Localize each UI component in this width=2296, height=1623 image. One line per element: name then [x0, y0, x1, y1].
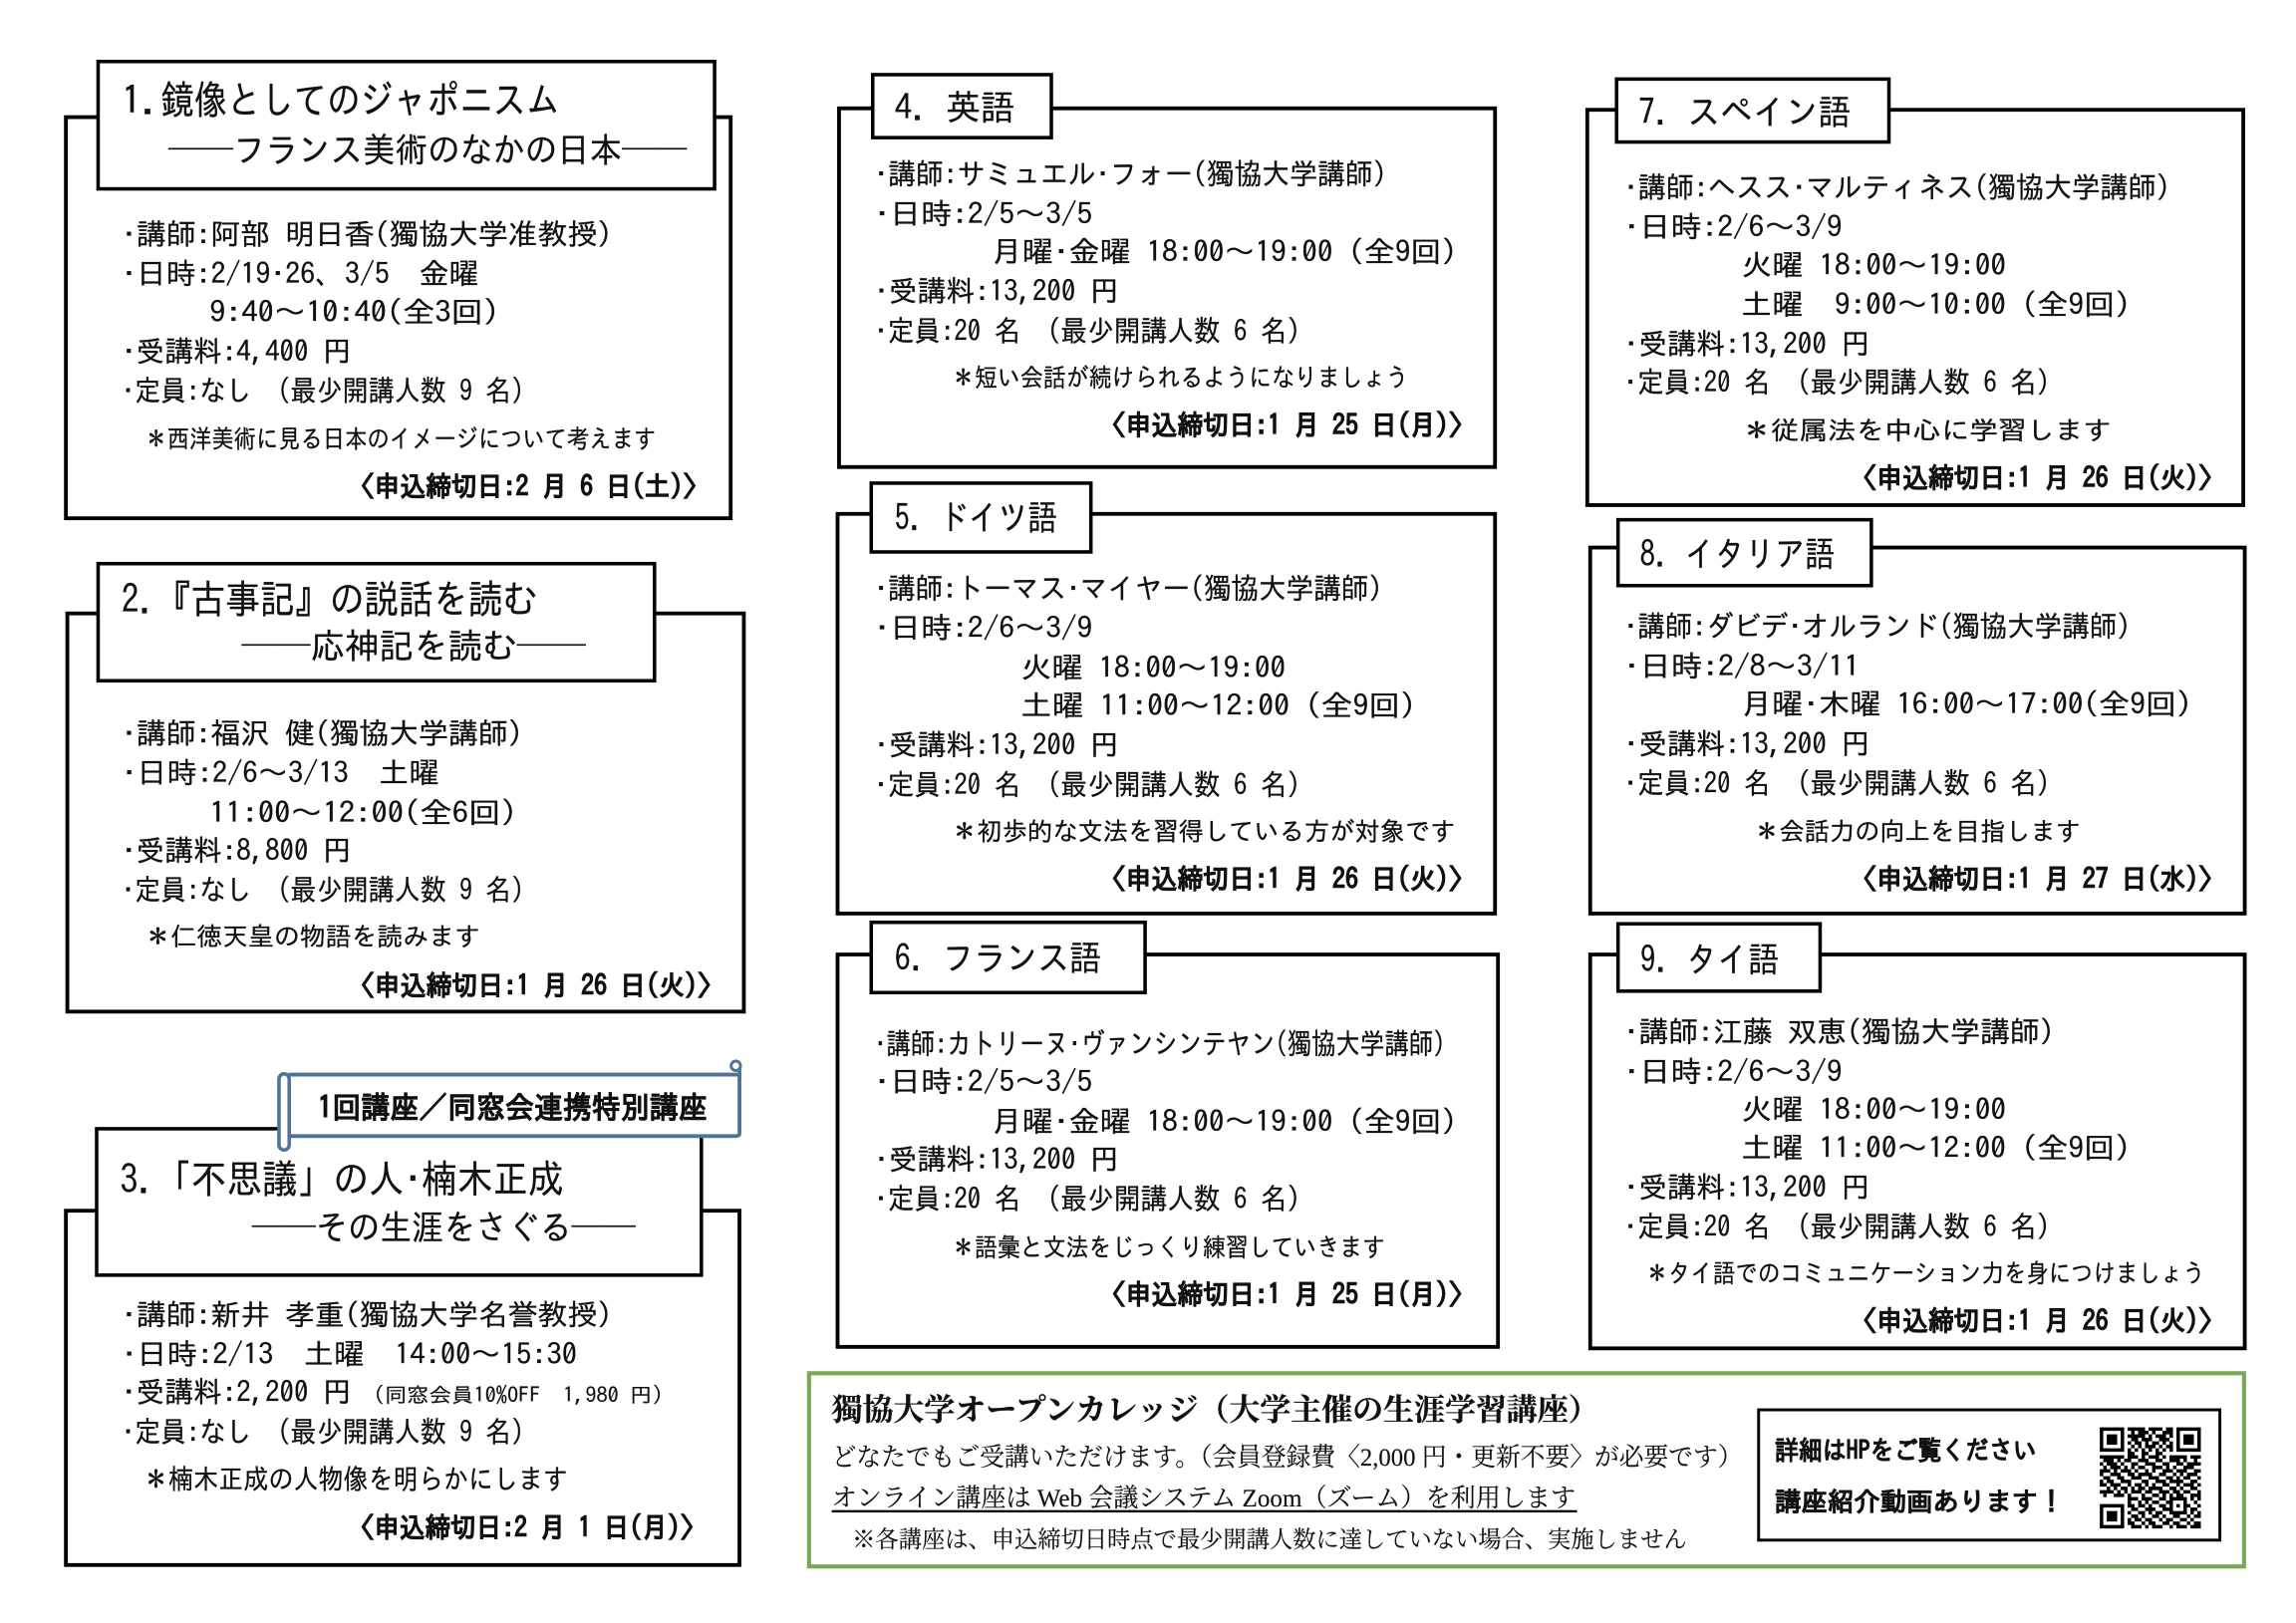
panel: course 5: [837, 483, 1495, 914]
panel: open college footer: [809, 1373, 2244, 1566]
note: ＊仁徳天皇の物語を読みます: [144, 924, 480, 949]
course details: ･講師:江藤 双恵(獨協大学講師): [1624, 1016, 2055, 1046]
heading: course 2: [98, 564, 655, 680]
course details: ･定員:20 名 (最少開講人数 6 名): [1624, 767, 2050, 797]
panel frame: [66, 118, 730, 518]
ribbon: special lecture: 1回講座／同窓会連携特別講座: [318, 1092, 708, 1123]
course details: ･講師:ヘスス･マルティネス(獨協大学講師): [1624, 171, 2170, 201]
course details: [1624, 171, 2170, 397]
footer text: どなたでもご受講いただけます。（会員登録費〈2,000 円・更新不要〉が必要です）: [832, 1443, 1743, 1472]
note: ＊西洋美術に見る日本のイメージについて考えます: [144, 426, 656, 452]
course details: ･講師:サミュエル･フォー(獨協大学講師): [874, 158, 1387, 188]
course details: ･日時:2/13 土曜 14:00〜15:30: [122, 1338, 577, 1368]
course details: ･定員:20 名 (最少開講人数 6 名): [1624, 367, 2050, 397]
panel: course 6: [837, 923, 1498, 1347]
deadline: 〈申込締切日:1 月 26 日(火)〉: [1851, 463, 2224, 491]
panel: course 7: [1587, 79, 2243, 505]
course details: ･受講料:13,200 円: [1624, 1172, 1869, 1202]
course details: ･日時:2/6〜3/9: [1624, 211, 1842, 241]
heading: course 1: 鏡像としてのジャポニスム: [161, 80, 559, 120]
heading: course 2: ──応神記を読む──: [241, 629, 586, 664]
panel frame: [839, 109, 1495, 467]
course details: ･定員:なし (最少開講人数 9 名): [122, 875, 524, 905]
panel: course 4: [839, 75, 1495, 467]
course details: ･日時:2/6〜3/13 土曜: [122, 757, 439, 787]
course details: 9:40〜10:40(全3回): [209, 296, 499, 326]
course details: ･定員:なし (最少開講人数 9 名): [122, 1416, 524, 1446]
course details: 月曜･木曜 16:00〜17:00(全9回): [1741, 688, 2192, 718]
course details: ･講師:福沢 健(獨協大学講師): [122, 717, 523, 747]
heading: course 1: 1.: [122, 80, 161, 120]
footer text: オンライン講座は Web 会議システム Zoom（ズーム）を利用します: [832, 1484, 1576, 1512]
note: ＊短い会話が続けられるようになりましょう: [952, 365, 1409, 391]
deadline: 〈申込締切日:1 月 26 日(火)〉: [1851, 1307, 2224, 1335]
course details: [874, 573, 1416, 799]
panel frame: [1590, 548, 2245, 914]
ribbon: special lecture: [279, 1061, 740, 1150]
heading: course 3: [97, 1129, 702, 1275]
panel: course 9: [1590, 924, 2245, 1348]
heading: course 7: [1616, 79, 1889, 142]
note: ＊従属法を中心に学習します: [1743, 417, 2112, 443]
panel frame: [1587, 110, 2243, 505]
heading: course 9: [1618, 924, 1820, 991]
heading: course 5: [871, 483, 1091, 552]
course details: [874, 1028, 1457, 1214]
callout: website and QR: [1759, 1410, 2220, 1540]
course details: [874, 158, 1457, 345]
course details: ･講師:トーマス･マイヤー(獨協大学講師): [874, 573, 1382, 603]
course details: [122, 717, 524, 905]
heading: course 3: ──その生涯をさぐる──: [252, 1211, 636, 1245]
course details: ･定員:20 名 (最少開講人数 6 名): [874, 769, 1300, 799]
heading: course 6: 6. フランス語: [895, 941, 1101, 975]
note: ＊タイ語でのコミュニケーション力を身につけましょう: [1646, 1260, 2205, 1286]
panel: course 1: [66, 62, 730, 518]
course details: 土曜 11:00〜12:00 (全9回): [1741, 1132, 2131, 1162]
deadline: 〈申込締切日:1 月 25 日(月)〉: [1100, 410, 1475, 438]
course details: ･定員:20 名 (最少開講人数 6 名): [874, 315, 1300, 345]
note: ＊楠木正成の人物像を明らかにします: [144, 1465, 568, 1492]
panel: course 2: [68, 564, 743, 1011]
course details: ･受講料:13,200 円: [874, 276, 1119, 306]
course details: ･定員:20 名 (最少開講人数 6 名): [1624, 1212, 2050, 1241]
panel: course 3: [66, 1061, 740, 1565]
deadline: 〈申込締切日:2 月 1 日(月)〉: [349, 1513, 706, 1541]
panel frame: [68, 614, 743, 1011]
course details: [1624, 611, 2192, 797]
footer text: [832, 1443, 1743, 1553]
course details: ･受講料:13,200 円: [874, 1144, 1119, 1174]
panel: course 8: [1590, 520, 2245, 914]
panel frame: [837, 954, 1498, 1347]
heading: course 4: 4. 英語: [895, 91, 1014, 126]
course details: [122, 1299, 664, 1446]
course details: ･日時:2/19･26、3/5 金曜: [122, 258, 478, 288]
course details: [1624, 1016, 2131, 1241]
footer text: ※各講座は、申込締切日時点で最少開講人数に達していない場合、実施しません: [852, 1526, 1687, 1553]
deadline: 〈申込締切日:1 月 27 日(水)〉: [1851, 865, 2224, 893]
course details: ･講師:カトリーヌ･ヴァンシンテヤン(獨協大学講師): [874, 1028, 1445, 1058]
heading: course 8: 8. イタリア語: [1640, 537, 1835, 572]
panel frame: [66, 1211, 739, 1565]
course details: ･講師:ダビデ･オルランド(獨協大学講師): [1624, 611, 2131, 641]
course details: ･受講料:4,400 円: [122, 336, 352, 366]
course details: ･定員:20 名 (最少開講人数 6 名): [874, 1184, 1300, 1214]
panel frame: [1590, 954, 2245, 1348]
course details: ･受講料:13,200 円: [874, 729, 1119, 759]
course details: ･日時:2/6〜3/9: [1624, 1056, 1842, 1086]
callout: website and QR: 詳細はHPをご覧ください: [1775, 1437, 2037, 1464]
course details: 火曜 18:00〜19:00: [1741, 249, 2006, 279]
course details: ･日時:2/8〜3/11: [1624, 651, 1860, 680]
heading: course 8: [1618, 520, 1871, 586]
heading: course 2: 2.『古事記』の説話を読む: [122, 579, 537, 619]
note: ＊会話力の向上を目指します: [1754, 818, 2081, 844]
course details: ･講師:新井 孝重(獨協大学名誉教授): [122, 1299, 612, 1329]
course details: ･日時:2/5〜3/5: [874, 1066, 1092, 1096]
panel frame: [837, 514, 1495, 914]
footer title: 獨協大学オープンカレッジ（大学主催の生涯学習講座）: [831, 1393, 1599, 1427]
course details: ･受講料:2,200 円: [122, 1377, 352, 1407]
heading: course 6: [871, 923, 1145, 992]
course details: ･日時:2/6〜3/9: [874, 613, 1092, 643]
deadline: 〈申込締切日:1 月 25 日(月)〉: [1100, 1280, 1475, 1308]
heading: course 7: 7. スペイン語: [1638, 95, 1851, 130]
footer frame: [809, 1373, 2244, 1566]
course details: 火曜 18:00〜19:00: [1020, 652, 1286, 681]
callout: website and QR: 講座紹介動画あります！: [1775, 1488, 2065, 1514]
course details: 月曜･金曜 18:00〜19:00 (全9回): [992, 1106, 1457, 1136]
course details: 11:00〜12:00(全6回): [209, 797, 517, 827]
deadline: 〈申込締切日:1 月 26 日(火)〉: [1100, 865, 1475, 893]
course details: ･受講料:13,200 円: [1624, 329, 1869, 359]
course details: 火曜 18:00〜19:00: [1741, 1094, 2006, 1124]
note: ＊語彙と文法をじっくり練習していきます: [952, 1234, 1385, 1260]
course details: 土曜 9:00〜10:00 (全9回): [1741, 289, 2131, 319]
course details: ･受講料:8,800 円: [122, 835, 352, 865]
course details: 月曜･金曜 18:00〜19:00 (全9回): [992, 236, 1457, 266]
heading: course 1: ──フランス美術のなかの日本──: [168, 133, 688, 167]
course details: [122, 218, 612, 406]
heading: course 5: 5. ドイツ語: [895, 500, 1057, 535]
course details: ･日時:2/5〜3/5: [874, 198, 1092, 228]
heading: course 1: [98, 62, 715, 189]
deadline: 〈申込締切日:2 月 6 日(土)〉: [349, 472, 709, 500]
course details: 土曜 11:00〜12:00 (全9回): [1020, 690, 1416, 720]
course details: ･受講料:13,200 円: [1624, 728, 1869, 758]
deadline: 〈申込締切日:1 月 26 日(火)〉: [349, 971, 723, 999]
heading: course 4: [873, 75, 1051, 137]
course details: ･定員:なし (最少開講人数 9 名): [122, 376, 524, 406]
course details: ･講師:阿部 明日香(獨協大学准教授): [122, 218, 612, 248]
course details: (同窓会員10%OFF 1,980 円): [374, 1385, 664, 1406]
icon: QR code: [2100, 1429, 2201, 1526]
note: ＊初歩的な文法を習得している方が対象です: [952, 818, 1456, 844]
heading: course 9: 9. タイ語: [1640, 943, 1779, 977]
heading: course 3: 3.「不思議」の人･楠木正成: [120, 1159, 564, 1199]
